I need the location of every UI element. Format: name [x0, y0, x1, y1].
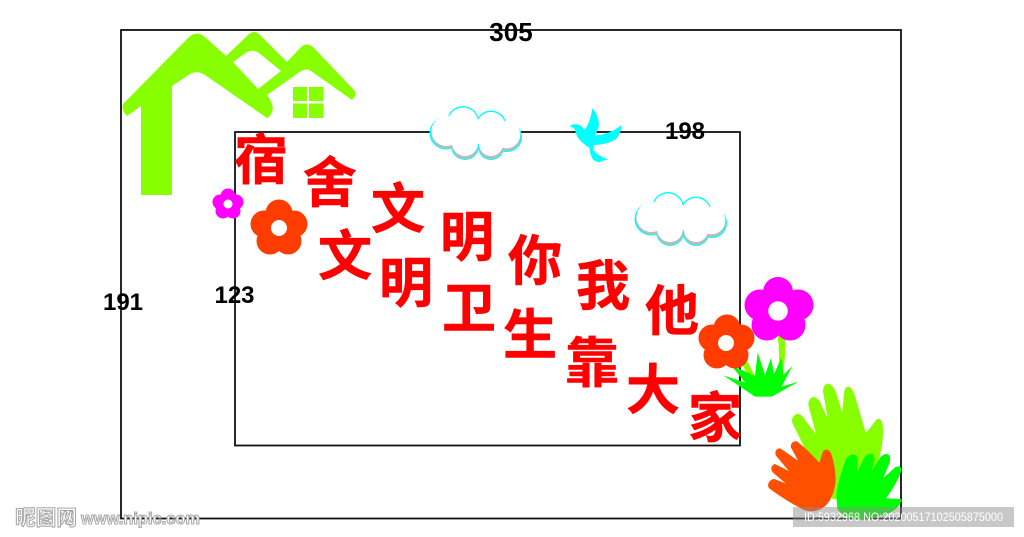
icon: cyan bird	[569, 108, 622, 162]
slogan line one	[234, 131, 699, 342]
watermark: nipic logo	[15, 507, 200, 530]
slogan line one: 舍	[303, 154, 357, 214]
icon: house window	[293, 87, 324, 118]
slogan line two: 生	[503, 306, 557, 366]
watermark: id bar: ID:5932968 NO:20200517102505875000	[804, 510, 1003, 524]
icon: cloud right	[634, 192, 727, 246]
outer frame	[121, 30, 901, 518]
slogan line one: 我	[576, 257, 630, 317]
slogan line one: 文	[371, 180, 425, 240]
slogan line two: 明	[379, 254, 433, 314]
icon: hand prints	[769, 385, 901, 518]
slogan line one: 你	[508, 232, 562, 292]
slogan line two: 卫	[442, 279, 496, 339]
number label: 191: 191	[103, 289, 143, 316]
icon: lime hand	[793, 385, 882, 498]
slogan line two	[318, 227, 742, 449]
watermark: id bar	[793, 507, 1014, 527]
icon: large magenta flower	[744, 277, 814, 340]
slogan line two: 家	[688, 389, 742, 449]
icon: green hand	[837, 455, 901, 518]
icon: orange flower left	[250, 200, 308, 254]
number label: 123: 123	[214, 282, 255, 309]
slogan line one: 明	[440, 208, 494, 268]
icon: house	[122, 32, 356, 195]
watermark: nipic logo: 昵图网	[15, 507, 77, 530]
slogan line one: 宿	[234, 131, 288, 191]
number label: 198: 198	[665, 118, 705, 145]
icon: grass and stems	[723, 335, 799, 397]
inner frame	[235, 132, 740, 446]
slogan line one: 他	[645, 282, 699, 342]
icon: orange flower right	[698, 314, 754, 368]
icon: cloud top	[430, 106, 522, 160]
icon: small magenta flower	[212, 188, 244, 218]
number label: 305: 305	[489, 17, 533, 47]
slogan line two: 大	[626, 361, 680, 421]
slogan line two: 文	[318, 227, 372, 287]
slogan line two: 靠	[565, 334, 619, 394]
icon: orange hand	[769, 442, 835, 510]
watermark: nipic logo: www.nipic.com	[80, 509, 200, 528]
